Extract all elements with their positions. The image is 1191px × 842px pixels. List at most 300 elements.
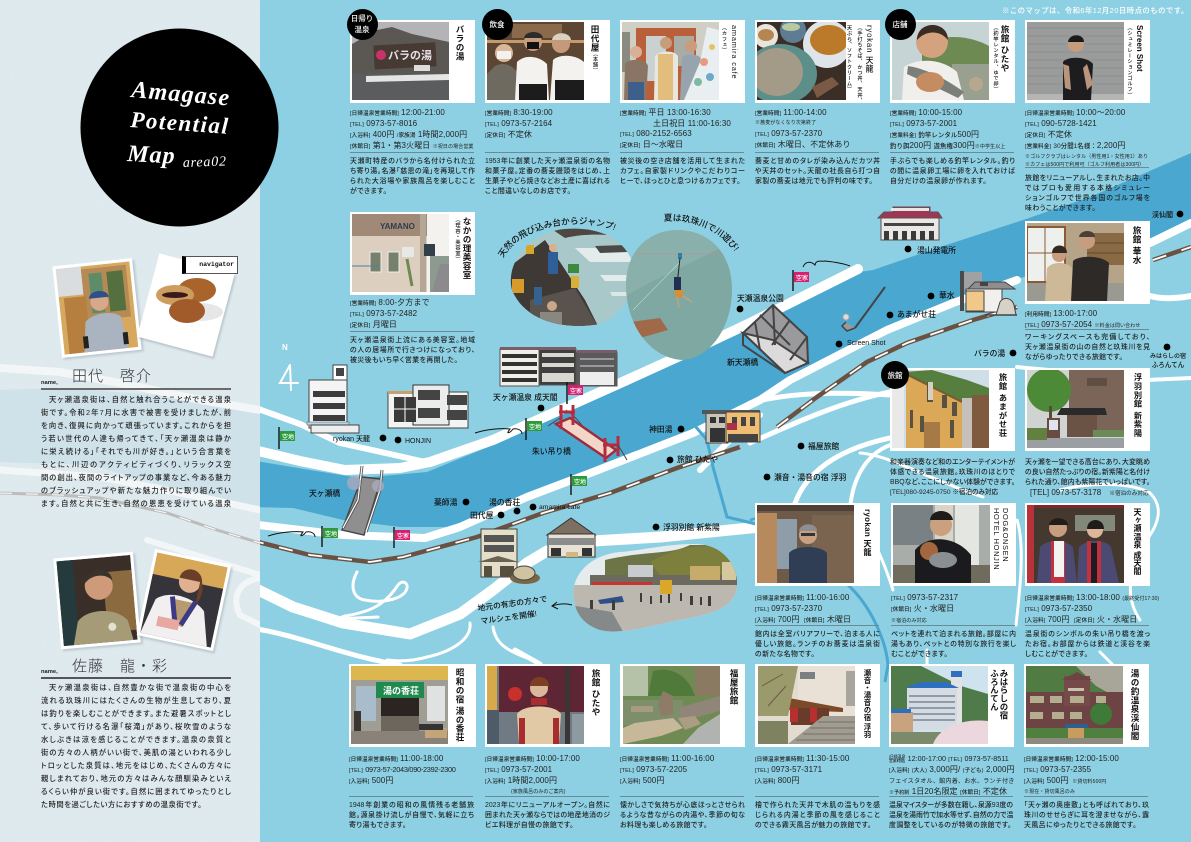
place labels: 朱い吊り橋 <box>532 446 571 456</box>
text: navigator message 2: 水しぶきは涼を感じることができます。温泉の泉質と <box>41 735 231 744</box>
description <box>620 801 745 831</box>
hours <box>350 108 474 150</box>
description: ペットを連れて泊まれる旅館。部屋に内 <box>891 631 1016 638</box>
hours: 土日祝日 11:00-16:30 <box>653 119 731 128</box>
hours: [日帰温泉営業時間] 11:00-16:00 <box>620 754 714 763</box>
hours: ※ゴルフクラブはレンタル（男性用1・女性用1）あり <box>1025 154 1148 160</box>
description: [TEL] 0973-57-3178 ※宿泊のみ対応 <box>1030 488 1149 497</box>
panel: Screen Shot <box>1025 20 1150 212</box>
hours: [営業時間] 平日 13:00-16:30 <box>620 108 711 117</box>
description: の間に温泉卵工場に卵を入れておけば <box>890 168 1015 175</box>
bridge: 新天瀬橋 <box>743 305 808 373</box>
text: navigator message 1: のブラッシュアップや新たな魅力作りに取り組んでい <box>41 486 231 495</box>
hours: [営業時間] 11:00-14:00 <box>755 108 827 117</box>
building: ryokan 天龍 <box>307 365 359 433</box>
description: ビエ料理が自慢の旅館です。 <box>485 822 574 829</box>
place labels: 旅館 ひたや <box>677 454 718 464</box>
photo card: 湯の香荘 <box>383 685 419 696</box>
photo card <box>891 503 1016 586</box>
description <box>485 801 610 831</box>
description: 家製の蕎麦は地元でも評判の味です。 <box>755 178 873 185</box>
photo card <box>755 503 880 586</box>
road <box>250 247 1191 562</box>
photo: navigator 田代 <box>52 258 142 358</box>
hours: [TEL] 0973-57-2001 <box>485 765 552 774</box>
flag 空家: 空家 <box>796 274 808 282</box>
description <box>889 801 1013 831</box>
description <box>1025 458 1150 497</box>
place labels: 天ヶ瀬温泉 成天閣 <box>493 392 558 402</box>
panel: DOG&ONSEN HOTEL HONJIN <box>891 503 1017 658</box>
description: るような昔ながらの内湯や、季節の旬な <box>620 812 745 819</box>
date note: ※このマップは、令和6年12月20日時点のものです。 <box>1002 6 1189 15</box>
panel: 旅館 あまがせ荘 <box>890 368 1015 496</box>
hours: [日帰温泉営業時間] 10:00〜20:00 <box>1025 108 1125 117</box>
description: 体感できる温泉旅館。玖珠川のほとりで <box>890 469 1015 476</box>
hours: [日帰温泉営業時間] 11:30-15:00 <box>755 754 849 763</box>
title: （理容・美容室） <box>454 217 460 262</box>
description <box>1025 630 1150 660</box>
name: 佐藤 龍・彩 <box>41 657 231 679</box>
hours: [休館日] 木曜日、不定休あり <box>755 140 851 149</box>
panel: 田代屋 <box>485 20 610 195</box>
navigator tag: navigator <box>199 261 234 268</box>
photo card <box>890 20 1015 103</box>
title <box>454 217 472 279</box>
description <box>349 801 474 831</box>
title: ryokan 天龍 <box>863 509 872 556</box>
place labels: 神田湯 <box>649 424 673 434</box>
hours: [TEL] 0973-57-2370 <box>755 604 822 613</box>
hours: [入浴料] 500円 <box>620 776 664 785</box>
title <box>721 25 739 79</box>
photo card <box>350 20 475 103</box>
hours: [TEL] 0973-57-2355 <box>1024 765 1091 774</box>
hours <box>755 754 849 787</box>
place labels: バラの湯 <box>974 348 1005 358</box>
hours: [TEL] 0973-57-2205 <box>620 765 687 774</box>
place labels <box>309 210 1186 532</box>
hours: [日帰温泉営業時間] 13:00-18:00 (最終受付17:30) <box>1025 593 1159 602</box>
description <box>1024 801 1149 831</box>
flags <box>279 270 809 548</box>
description: カフェ。自家製ドリンクやこだわりコー <box>620 168 745 175</box>
title: （釣竿レンタル、ゆで卵） <box>992 25 998 92</box>
hours: [定休日] 月曜日 <box>350 320 397 329</box>
text: navigator message 1: を向き、復興に向かって頑張っています。これからを担 <box>41 421 231 430</box>
panel: ryokan 天龍 食事 <box>755 20 880 185</box>
title badge: Potential <box>129 107 230 139</box>
place labels: amamira cafe <box>539 504 580 511</box>
hours: [休館日] 火・水曜日 <box>891 604 954 613</box>
description: ながらゆったりできる旅館です。 <box>1025 354 1123 361</box>
photo card <box>1025 368 1150 451</box>
hours: [日帰温泉営業時間] 11:00-16:00 <box>755 593 849 602</box>
hours: [定休日] 不定休 <box>1025 130 1072 139</box>
place labels: ryokan 天龍 <box>333 434 370 443</box>
badge: 日帰り温泉: 日帰り <box>351 14 373 23</box>
photo captions: 天然の飛び込み台からジャンプ! <box>498 217 616 258</box>
title: ふろんてん <box>990 669 1000 711</box>
flag 空家 <box>567 382 583 404</box>
description: や天丼のセット。天龍の社長自ら打つ自 <box>755 168 880 175</box>
flag 空地 <box>526 418 542 440</box>
white streams <box>250 223 1191 665</box>
title: Screen Shot <box>1135 25 1144 72</box>
hours <box>1024 754 1119 797</box>
description: の良い自然たっぷりの宿。新紫陽と名付け <box>1025 469 1150 476</box>
description: ができます。 <box>350 188 387 195</box>
title: amamira cafe <box>730 25 739 79</box>
building: 田代屋 <box>478 529 540 584</box>
description <box>1025 333 1150 361</box>
panel: バラの湯 <box>350 20 475 195</box>
panel: 昭和の宿 湯の香荘 <box>349 664 476 830</box>
description: 館。源泉掛け流しが自慢で、気軽に立ち <box>349 812 474 819</box>
hours: [日帰温泉営業時間] 12:00-21:00 <box>350 108 445 117</box>
text: navigator message 2: た時間を過ごしたい方におすすめの温泉街です。 <box>41 800 202 809</box>
description: ヒーで、ほっとひと息つけるカフェです。 <box>620 178 741 185</box>
name: 田代 啓介: name, <box>41 380 58 386</box>
description: [TEL]080-9245-0750 ※宿泊のみ対応 <box>890 489 998 496</box>
description <box>755 157 880 185</box>
text: navigator message 2: 流れる玖珠川にはたくさんの生物が生息しており、夏 <box>41 696 231 705</box>
badge: 日帰り温泉 <box>346 8 378 40</box>
description <box>350 157 475 195</box>
hours: [入浴料] 800円 <box>755 776 799 785</box>
text: navigator message 1: 街です。令和2年7月に水害で被害を受けましたが、前 <box>41 408 231 417</box>
hours: [日帰温泉営業時間] 11:00-18:00 <box>349 754 443 763</box>
title: HOTEL HONJIN <box>992 508 1001 570</box>
description: 1948年創業の昭和の風情残る老舗旅 <box>349 802 474 809</box>
description: 被災後もいち早く営業を再開した。 <box>350 357 458 364</box>
river <box>250 153 1191 527</box>
description: 和菓子屋。定番の蕎麦饅頭をはじめ、上 <box>485 168 610 175</box>
hours: ※予約制 1日20名限定 [休館日] 不定休 <box>889 787 1007 796</box>
photo captions <box>498 214 740 258</box>
hours: [定休日] 不定休 <box>485 130 532 139</box>
hours: [TEL] 0973-57-2054 ※料金は問い合わせ <box>1025 320 1140 329</box>
place labels: 薬師湯 <box>434 497 458 507</box>
description: 自分だけの温泉卵が作れます。 <box>890 178 987 185</box>
navigator tag <box>182 256 238 274</box>
title: 旅館 あまがせ荘 <box>998 373 1007 437</box>
badge: 店舗 <box>884 8 916 40</box>
marche caption: マルシェを開催! <box>480 608 537 626</box>
hours: [営業時間] 10:00-15:00 <box>890 108 962 117</box>
flag 空地: 空地 <box>325 530 337 538</box>
description: 館内は全室バリアフリーで、泊まる人に <box>755 631 880 638</box>
title: 田代屋 (本舗) <box>590 25 600 70</box>
title <box>992 25 1010 92</box>
hours: [TEL] 0973-57-2370 <box>755 129 822 138</box>
description: 「天ヶ瀬の奥座敷」とも呼ばれており、玖 <box>1024 802 1149 809</box>
description: 度調整をしているのが特徴の旅館です。 <box>889 822 1012 829</box>
photo: navigator 彩 <box>137 549 231 651</box>
place labels: 渓仙閣 <box>1152 210 1173 219</box>
place labels: 福屋旅館 <box>808 441 839 451</box>
description: 懐かしさで気持ちが心底ほっとさせられ <box>620 802 745 809</box>
panel: 旅館 ひたや 釣竿 <box>890 20 1015 185</box>
hours <box>1025 593 1159 626</box>
hours <box>891 593 958 626</box>
description: 天ヶ瀬温泉街の山の自然と玖珠川を見 <box>1025 344 1150 351</box>
description: ではプロも愛用する本格シミュレー <box>1025 185 1150 192</box>
hours: [入浴料] 500円 <box>349 776 393 785</box>
description: 蕎麦と甘めのタレが染み込んだカツ丼 <box>755 158 880 165</box>
text: navigator message 2: て、歩いて行ける名瀑「桜滝」があり、桜吹雪のような <box>41 722 231 731</box>
text: navigator message 1 <box>41 395 231 508</box>
description <box>890 157 1015 185</box>
title <box>992 508 1010 584</box>
photo card: バラの湯 <box>388 48 432 62</box>
title: ryokan 天龍 <box>865 25 874 73</box>
hours: [入浴料] (大人) 3,000円/ (子ども) 2,000円 <box>889 765 1015 774</box>
photo card <box>755 664 880 747</box>
hours: [TEL] 080-2152-6563 <box>620 129 692 138</box>
description: 温泉を湯雨竹で加水等せず、自然の力で温 <box>889 812 1013 819</box>
place labels: Screen Shot <box>847 340 886 347</box>
description: の新たな名物です。 <box>755 651 815 658</box>
text: navigator message 1: ます。自然と共に生き、自然の恩恵を受けている温泉 <box>41 499 231 508</box>
blob photo: marche <box>573 544 738 632</box>
description: こと間違いなしのお店です。 <box>485 188 571 195</box>
place labels: 華水 <box>939 290 955 300</box>
description: 味わうことができます。 <box>1025 205 1096 212</box>
title: 天ヶ瀬温泉 成天閣 <box>1133 508 1142 575</box>
place labels: 湯山発電所 <box>917 245 956 255</box>
hours <box>755 593 851 626</box>
description: BBQなど、ここにしかない体験ができます。 <box>890 479 1015 486</box>
building: HONJIN <box>388 385 468 428</box>
description: じられる内湯と季節の風を感じること <box>755 812 880 819</box>
description: 天ヶ瀬を一望できる高台にあり、大変眺め <box>1025 459 1150 466</box>
description: 檜で作られた天井で木肌の温もりを感 <box>755 802 880 809</box>
title: DOG&ONSEN <box>1001 508 1010 562</box>
hours <box>485 754 580 797</box>
description: 1953年に創業した天ヶ瀬温泉街の名物 <box>485 158 610 165</box>
title: 旅館 華水 <box>1132 226 1142 264</box>
hours: [休館日] 第1・第3火曜日 ※祝日の場合営業 <box>350 141 474 150</box>
map background <box>260 6 1191 682</box>
title line: Amagase <box>128 77 231 112</box>
north arrow: N <box>282 343 288 352</box>
flag 空地 <box>322 526 338 547</box>
golf club <box>842 287 885 331</box>
description: たお宿。お部屋からは鉄道と渓谷を楽 <box>1025 641 1150 648</box>
bridge: 朱い吊り橋 <box>548 405 627 462</box>
description: 優しい旅館。ランチのお蕎麦は温泉街 <box>755 641 880 648</box>
hours: [TEL] 0973-57-3171 <box>755 765 822 774</box>
badge: 飲食: 飲食 <box>490 20 504 28</box>
text: navigator message 2 <box>41 683 231 809</box>
title: なかの理美容室 <box>462 217 472 279</box>
flag 空地 <box>571 474 587 495</box>
place labels: 天瀬温泉公園 <box>737 293 784 303</box>
building: 湯山発電所 <box>878 207 942 240</box>
hours <box>349 754 456 787</box>
title badge: area02 <box>183 154 227 171</box>
flag 空地: 空地 <box>529 423 541 431</box>
hours: (家族風呂のみのご案内) <box>511 789 566 795</box>
hours: [定休日] 日〜水曜日 <box>620 140 683 149</box>
flag 空地: 空地 <box>574 478 586 486</box>
building: amamira cafe <box>547 518 595 557</box>
photo card <box>890 368 1015 451</box>
description: 2023年にリニューアルオープン。自然に <box>485 802 610 809</box>
hours: [入浴料] 400円 /家族湯 1時間2,000円 <box>350 130 467 139</box>
photo card <box>1025 20 1150 103</box>
hours <box>889 754 1015 798</box>
hours: [営業料金] 釣竿レンタル500円 <box>890 130 979 139</box>
text: navigator message 2: トロッとした泉質は、地元をはじめ、たくさんの方々に <box>41 761 231 770</box>
name: 田代 啓介 <box>41 366 231 390</box>
hours: フェイスタオル、館内着、お水、ランチ付き <box>889 778 1015 785</box>
description <box>891 630 1016 660</box>
badge: 店舗: 店舗 <box>892 20 908 28</box>
place labels: 湯の香荘 <box>489 497 520 507</box>
hours: [入浴料] 700円 [休館日] 木曜日 <box>755 615 851 624</box>
hours: [日帰温泉 <box>889 755 905 759</box>
description: 生菓子やどら焼きなどお土産に喜ばれる <box>485 178 610 185</box>
description: 寄り湯もできます。 <box>349 822 407 829</box>
panel: left sidebar <box>0 0 260 842</box>
photo card <box>1025 221 1150 304</box>
photo card <box>620 20 745 103</box>
photo card <box>1024 664 1149 747</box>
photo card <box>889 664 1014 747</box>
photo card <box>1025 503 1150 586</box>
hours: 営業時間] <box>889 759 905 763</box>
place labels: あまがせ荘 <box>897 309 936 319</box>
hours <box>350 298 430 329</box>
badge: 旅館: 旅館 <box>888 370 902 380</box>
hours: [TEL] 0973-57-2317 <box>891 593 958 602</box>
panel: 天ヶ瀬温泉 成天閣 <box>1025 503 1175 658</box>
name: 佐藤 龍・彩: name, <box>41 669 58 675</box>
photo card <box>349 664 476 747</box>
hours: [営業時間] 8:30-19:00 <box>485 108 553 117</box>
hours: [TEL] 0973-57-2164 <box>485 119 552 128</box>
north arrow <box>280 343 298 390</box>
description <box>485 157 610 195</box>
hours: [日帰温泉営業時間] 12:00-15:00 <box>1024 754 1119 763</box>
text: navigator message 2: 親しまれており、地元の方々はみんな顔馴染みといえ <box>41 774 231 783</box>
title: 旅館 ひたや <box>1000 25 1010 72</box>
title: （カフェ） <box>721 25 727 53</box>
title: バラの湯 <box>455 25 465 61</box>
marche caption <box>477 593 572 626</box>
description: 天ヶ瀬温泉街上流にある美容室。地域 <box>350 337 475 344</box>
description: 和楽器演奏など和のエンターテイメントが <box>890 459 1015 466</box>
wind curls <box>268 261 850 537</box>
place labels: 田代屋 <box>470 510 494 520</box>
name: 佐藤 龍・彩: 佐藤 龍・彩 <box>72 655 168 676</box>
description: のできる霧天風呂が魅力の旅館です。 <box>755 822 872 829</box>
description <box>620 157 745 185</box>
description: 天瀬町特産のバラから名付けられた立 <box>350 158 475 165</box>
hours <box>1025 108 1148 168</box>
photo card: YAMANO <box>380 222 415 231</box>
photo card <box>620 664 745 747</box>
hours <box>1025 309 1140 329</box>
hours: [入浴料] 700円 [定休日] 火・水曜日 <box>1025 615 1137 624</box>
hours <box>890 108 1005 150</box>
flag 空家: 空家 <box>397 532 409 540</box>
title: 旅館 ひたや <box>591 669 601 716</box>
description: 湯もあり、ペットとの特別な旅行を楽し <box>891 641 1016 648</box>
description: ち寄り湯。名瀑「慈恩の滝」を再現して作 <box>350 168 475 175</box>
text: navigator message 1: う若い世代の人達も帰ってきて、「天ヶ瀬温泉は静か <box>41 434 231 443</box>
hours: ※カフェは500円で利用可（ゴルフ利用者は300円） <box>1025 162 1144 168</box>
hours: [TEL] 0973-57-2350 <box>1025 604 1092 613</box>
flag 空地: 空地 <box>282 433 294 441</box>
flag 空家: 空家 <box>570 387 582 395</box>
hours: [利用時間] 13:00-17:00 <box>1025 309 1097 318</box>
panel: 福屋旅館 <box>620 664 746 830</box>
badge: 飲食 <box>482 8 512 40</box>
badge: 日帰り温泉: 温泉 <box>354 25 370 34</box>
place labels: ふろんてん <box>1152 361 1185 369</box>
building: 成天閣 <box>500 347 617 386</box>
description: 珠川のせせらぎに耳を澄ませながら、露 <box>1024 812 1149 819</box>
panel: 旅館 華水 <box>1025 221 1150 361</box>
title: 天ぷら、ソフトクリーム） <box>846 25 852 92</box>
photo card <box>485 664 610 747</box>
description <box>1025 174 1150 212</box>
photo: dorayaki <box>137 253 235 357</box>
hours <box>755 108 851 149</box>
place labels: 浮羽別館 新紫陽 <box>663 522 720 532</box>
description: 被災後の空き店舗を活用して生まれた <box>620 158 745 165</box>
hours: [TEL] 0973-57-8016 <box>350 119 417 128</box>
panel: なかの理美容室 <box>350 212 475 364</box>
hours: ※現在・貸切風呂のみ <box>1024 789 1075 795</box>
hours <box>620 108 731 149</box>
marche caption: 地元の有志の方々で <box>477 593 548 613</box>
flag 空地 <box>279 427 295 449</box>
description: 手ぶらでも楽しめる釣竿レンタル。釣り <box>890 158 1015 165</box>
hours: [日帰温泉営業時間] 10:00-17:00 <box>485 754 580 763</box>
hours: [入浴料] 1時間2,000円 <box>485 776 557 785</box>
hours: [営業時間] 8:00-夕方まで <box>350 298 430 307</box>
place labels: 瀬音・湯音の宿 浮羽 <box>774 472 847 482</box>
description <box>350 336 475 364</box>
title: 浮羽別館 新紫陽 <box>1133 373 1142 437</box>
title: （シュミレーションゴルフ） <box>1126 25 1132 98</box>
panel: 湯の釣温泉 渓仙閣 <box>1024 664 1150 830</box>
panel: 旅館 ひたや <box>485 664 611 830</box>
text: navigator message 2: 街の方々の人柄がいい街で、美肌の湯といわれる少し <box>41 748 231 757</box>
photo card <box>485 20 610 103</box>
blob photo: river jump <box>510 228 631 326</box>
hours: [TEL] 0973-57-2001 <box>890 119 957 128</box>
building: 旅館ひたや <box>702 410 760 443</box>
place labels: HONJIN <box>405 438 431 445</box>
description: られた大浴場や家族風呂を楽しむこと <box>350 178 475 185</box>
text: navigator message 1: に栄え続ける」「それでも川が好き。」という合言葉を <box>41 447 231 456</box>
panel: ryokan 天龍 <box>755 503 880 658</box>
title badge <box>80 28 278 226</box>
bridge: 天ヶ瀬橋 <box>342 466 384 535</box>
hours: ※宿泊のみ対応 <box>891 618 927 624</box>
description: ションゴルフで世界各国のゴルフ場を <box>1025 195 1150 202</box>
hours: [TEL] 0973-57-2043/090-2392-2300 <box>349 765 456 774</box>
title: （手打ちそば、かつ丼、天丼、 <box>856 25 862 103</box>
title: みはらしの宿 <box>999 669 1009 719</box>
title: 湯の釣温泉渓仙閣 <box>1130 669 1140 740</box>
hours: 12:00-17:00 [TEL] 0973-57-8511 <box>908 754 1009 763</box>
